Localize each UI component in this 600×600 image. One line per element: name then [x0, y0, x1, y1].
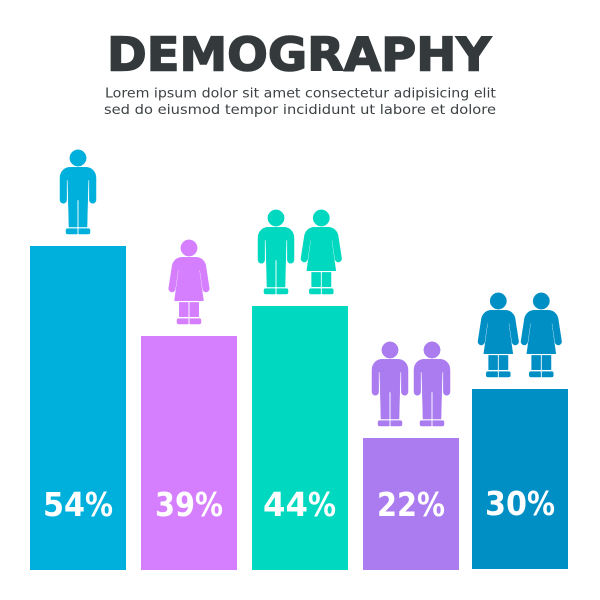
panel: 30% bar — [472, 293, 568, 569]
icon: man — [372, 342, 408, 426]
value: % — [527, 484, 555, 523]
title: DEMOGRAPHY — [107, 28, 492, 82]
bar — [141, 336, 237, 570]
value: 44 — [263, 485, 308, 524]
bar — [363, 438, 459, 570]
bar — [252, 306, 348, 570]
icon: man — [258, 210, 294, 294]
panel: 44% bar — [252, 210, 348, 570]
value: 39 — [155, 485, 195, 524]
icon: woman — [521, 293, 562, 377]
value: % — [417, 485, 445, 524]
subtitle: Lorem ipsum dolor sit amet consectetur adipisicing elit — [105, 86, 496, 102]
value: 54 — [43, 485, 85, 524]
icon: man — [60, 150, 96, 234]
value — [485, 484, 555, 523]
panel: 54% bar — [30, 150, 126, 570]
value: 22 — [377, 485, 417, 524]
value: % — [85, 485, 113, 524]
icon: man — [414, 342, 450, 426]
value — [43, 485, 113, 524]
value — [155, 485, 223, 524]
value: % — [195, 485, 223, 524]
subtitle: sed do eiusmod tempor incididunt ut labore et dolore — [104, 102, 496, 118]
value — [377, 485, 445, 524]
value: 30 — [485, 484, 527, 523]
value — [263, 485, 336, 524]
panel: 39% bar — [141, 240, 237, 570]
value: % — [308, 485, 336, 524]
icon: woman — [301, 210, 342, 294]
subtitle — [104, 86, 496, 118]
bar — [472, 389, 568, 569]
icon: woman — [478, 293, 519, 377]
icon: woman — [169, 240, 209, 324]
bar — [30, 246, 126, 570]
panel: 22% bar — [363, 342, 459, 570]
